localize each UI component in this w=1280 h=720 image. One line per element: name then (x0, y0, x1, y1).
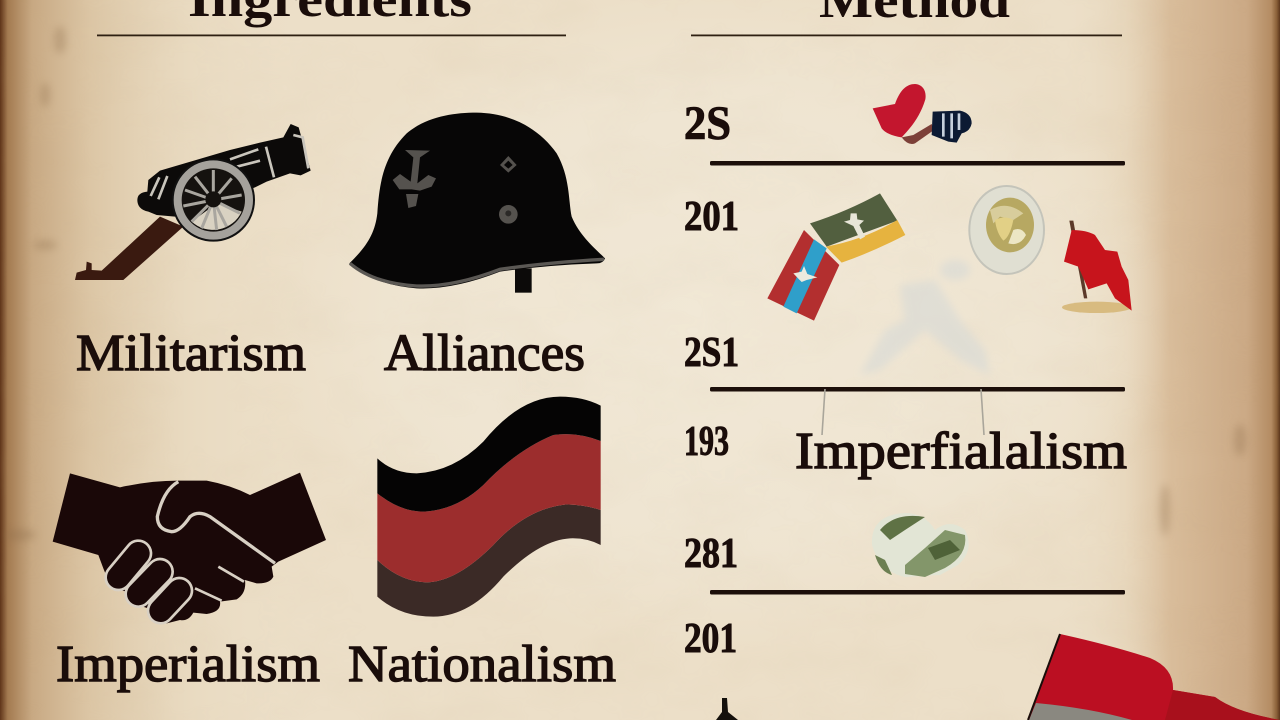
label: Imperialism: Imperialism (56, 636, 320, 693)
row number 2: 201 (684, 194, 739, 240)
hanging strings (822, 389, 984, 435)
icon: cannon (75, 124, 311, 280)
icon: green globe (872, 513, 969, 577)
divider 3 (710, 590, 1125, 594)
icon: red flag on mound (1062, 221, 1132, 313)
icon: pale globe (969, 186, 1044, 274)
row number 5: 281 (684, 531, 738, 577)
label: Nationalism: Nationalism (348, 636, 616, 693)
icon: large red and grey flag (1028, 634, 1280, 720)
heading rule: Method (691, 34, 1122, 36)
panel: method (684, 84, 1280, 720)
icon: helmet (349, 113, 605, 293)
heading rule: Ingredients (97, 34, 566, 36)
icon: handshake (53, 473, 326, 630)
panel: ingredients (53, 113, 616, 693)
row number 4: 193 (684, 419, 729, 465)
divider 2 (710, 387, 1125, 392)
icon: red cap and mug (873, 84, 972, 144)
icon: black spike (716, 698, 738, 720)
divider 1 (710, 161, 1125, 166)
row number 1: 2S (684, 97, 731, 150)
label: Imperfialalism: Imperfialalism (795, 423, 1127, 480)
row number 3: 2S1 (684, 330, 739, 376)
icon: tricolour flag (377, 397, 601, 617)
label: Alliances: Alliances (384, 325, 585, 382)
label: Militarism: Militarism (76, 325, 306, 382)
icon: crossed flags (767, 193, 905, 321)
ghost figure (860, 260, 990, 375)
row number 6: 201 (684, 616, 737, 662)
